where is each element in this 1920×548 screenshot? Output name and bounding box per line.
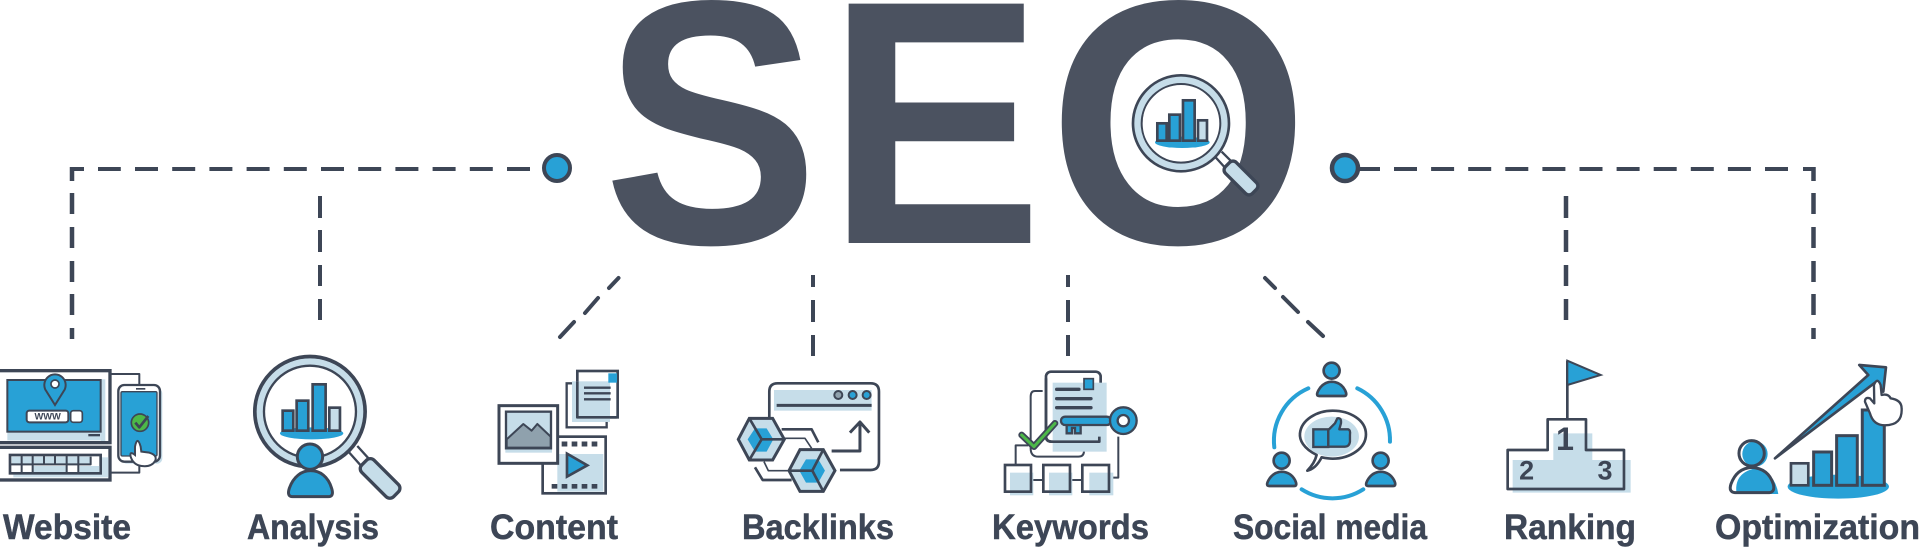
label: Website: Website — [3, 508, 131, 547]
icon: ranking: 1 — [1556, 421, 1574, 457]
title: SEO — [603, 0, 1309, 318]
icon: social media — [1267, 363, 1395, 498]
icon: website: WWW — [34, 412, 61, 422]
label: Analysis: Analysis — [247, 508, 379, 547]
icon: content — [499, 371, 618, 493]
icon: ranking: 3 — [1597, 455, 1612, 485]
connector: right dashed bracket and dot — [1332, 155, 1815, 339]
icon: website — [0, 371, 162, 480]
connector: inner dashed lines — [320, 196, 1566, 356]
connector: left dashed bracket and dot — [72, 155, 570, 339]
label: Content: Content — [490, 508, 618, 547]
icon: keywords — [1005, 372, 1137, 495]
label: Social media: Social media — [1233, 508, 1427, 547]
icon: magnifier in the O — [1134, 76, 1260, 197]
label: Keywords: Keywords — [992, 508, 1149, 547]
label: Backlinks: Backlinks — [742, 508, 894, 547]
label: Ranking: Ranking — [1504, 508, 1636, 547]
icon: ranking: 2 — [1519, 455, 1534, 485]
icon: backlinks — [738, 383, 879, 491]
icon: analysis — [255, 357, 402, 500]
icon: optimization — [1730, 365, 1902, 499]
icon: ranking — [1508, 361, 1631, 493]
